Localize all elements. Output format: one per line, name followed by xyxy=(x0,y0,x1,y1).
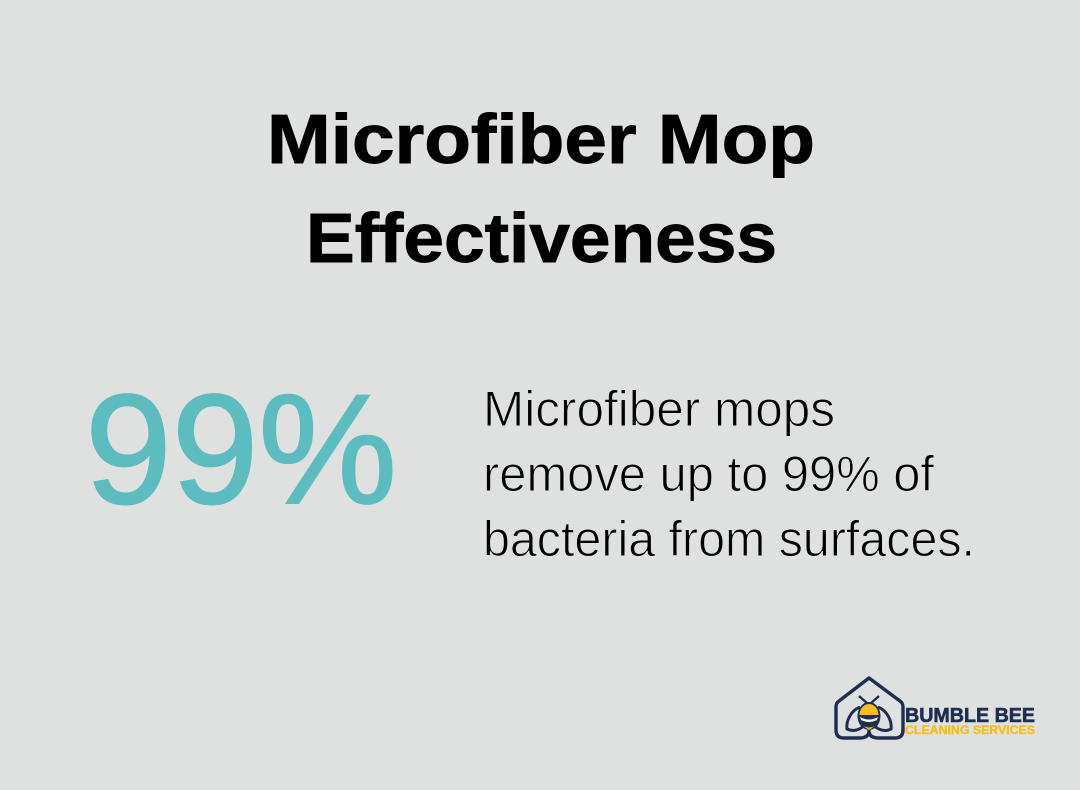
big stat: 99%: 99% xyxy=(85,363,397,537)
stat description xyxy=(483,381,975,567)
logo wordmark: BUMBLE BEE xyxy=(905,705,1035,727)
title: Microfiber Mop xyxy=(267,100,815,178)
stat description: Microfiber mops xyxy=(483,381,835,437)
icon: house outline with bee xyxy=(836,678,903,738)
stat description: bacteria from surfaces. xyxy=(483,511,975,567)
title: Effectiveness xyxy=(306,199,777,277)
logo: Bumble Bee Cleaning Services xyxy=(836,678,1035,738)
stat description: remove up to 99% of xyxy=(483,446,934,502)
logo tagline: CLEANING SERVICES xyxy=(905,725,1035,737)
title xyxy=(267,100,815,277)
